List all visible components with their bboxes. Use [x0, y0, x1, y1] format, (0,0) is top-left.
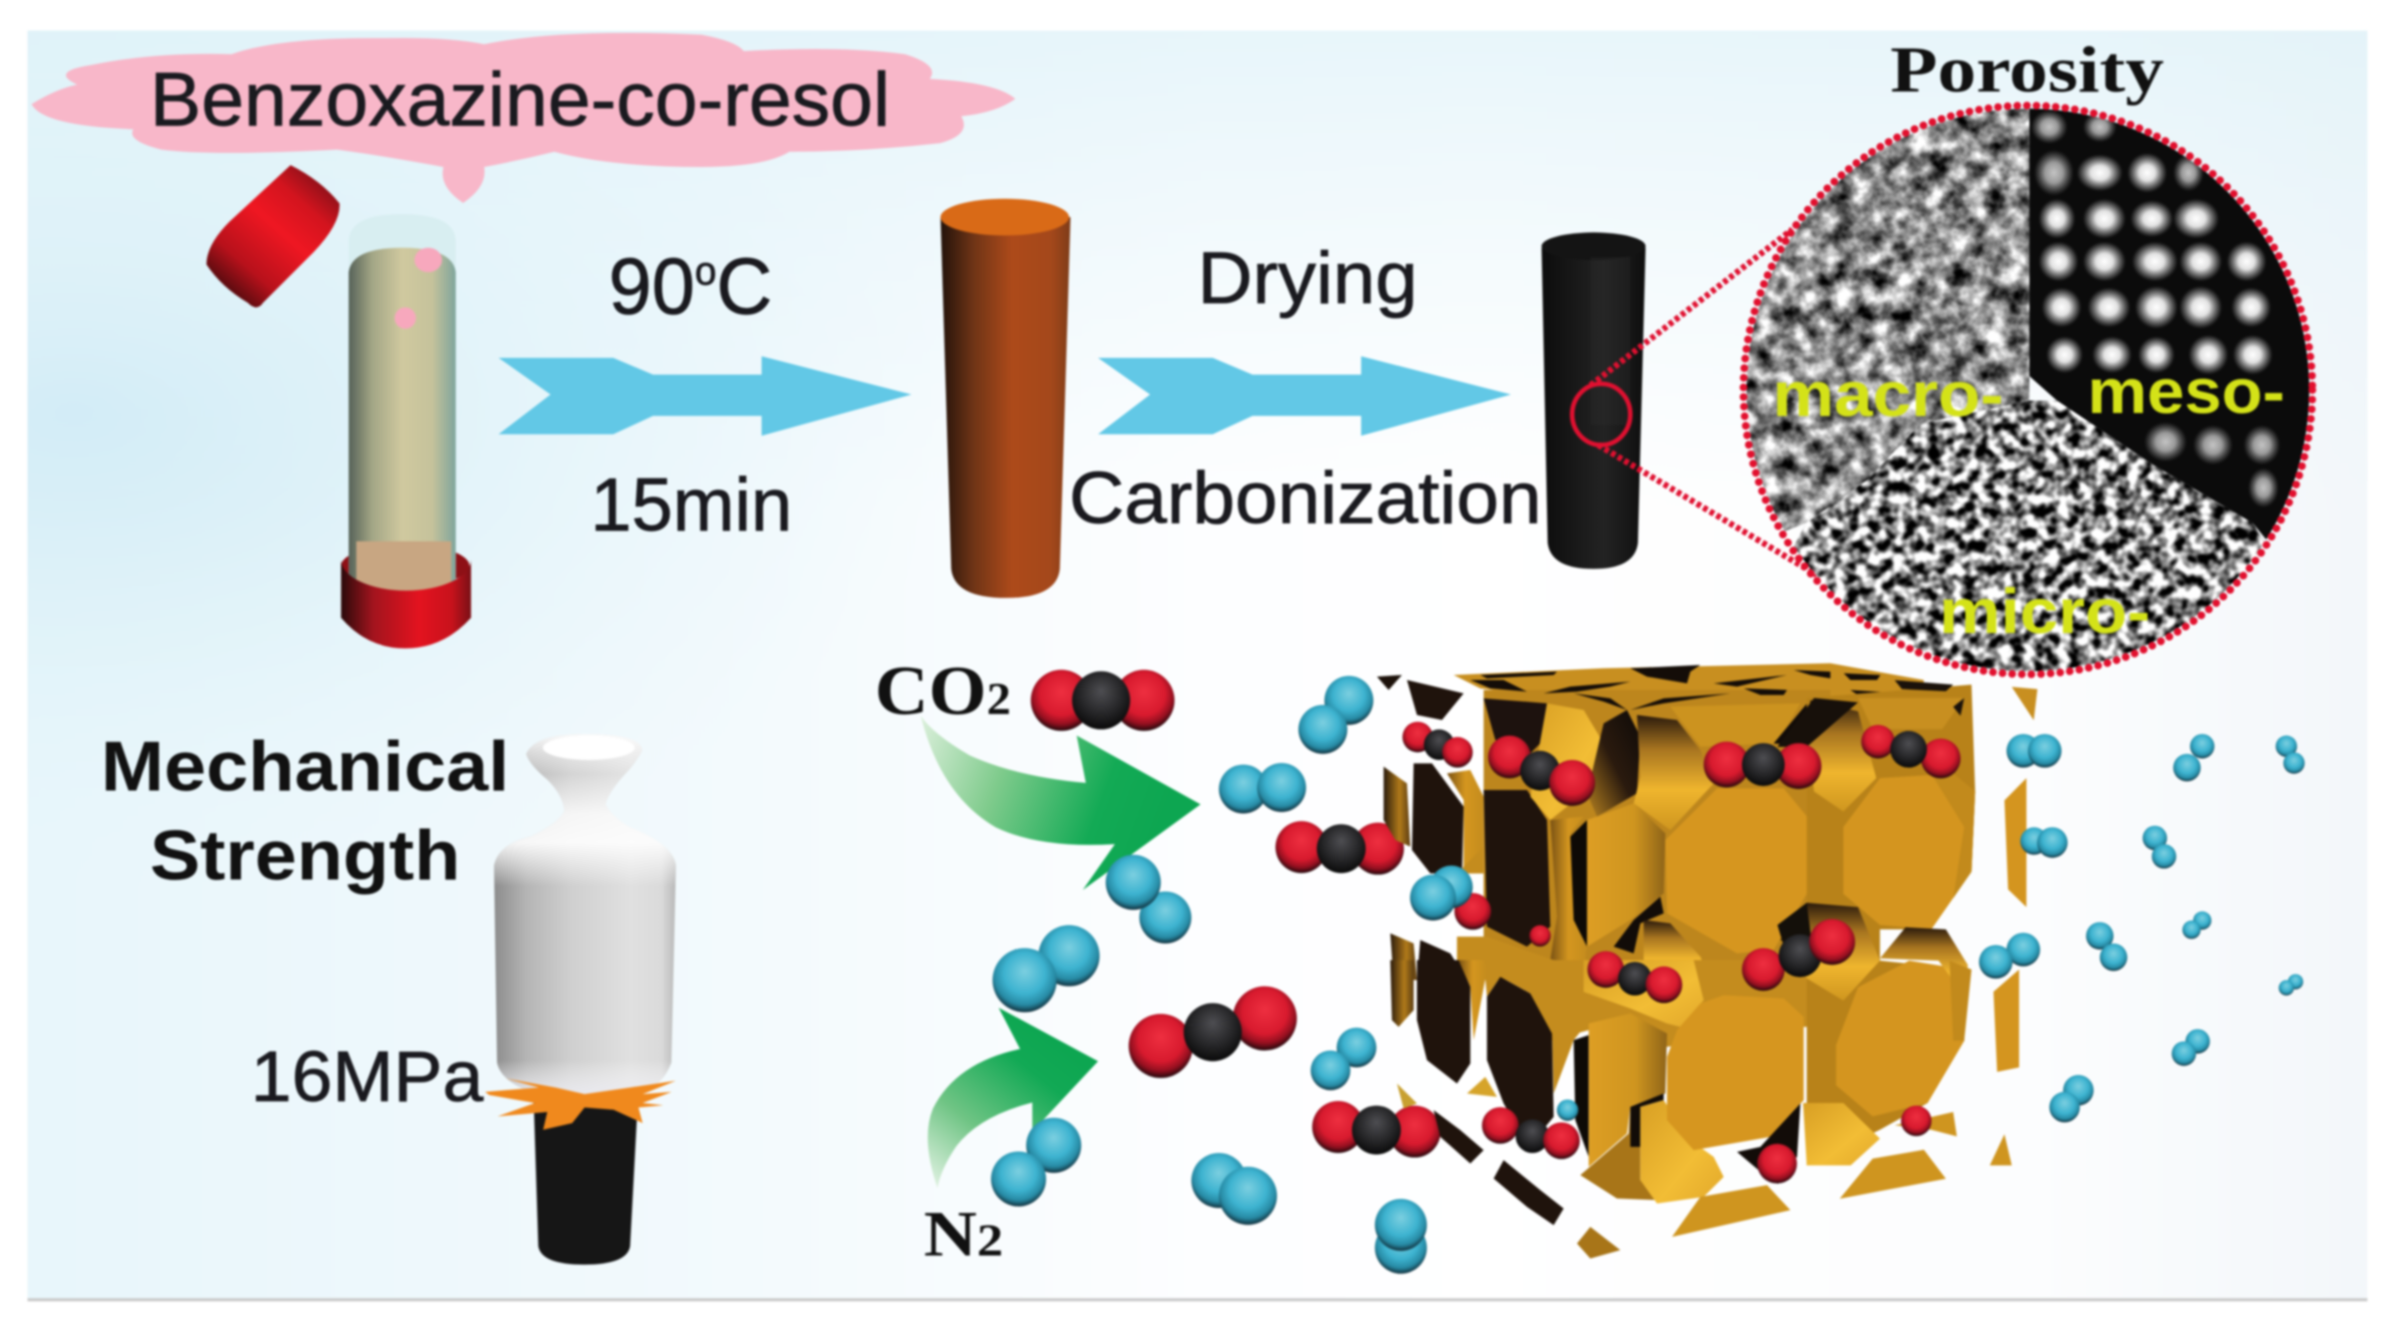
icon: orange impact burst — [485, 1079, 676, 1130]
icon: white compression weight — [494, 734, 676, 1096]
molecules: CO2 adsorbed in cube pores — [1402, 722, 1961, 1184]
arrow: drying and carbonization step — [1098, 356, 1511, 436]
heading: Drying: Drying — [1197, 237, 1418, 319]
heading: Mechanical Strength: Mechanical — [101, 727, 509, 806]
arrow: CO2 green flow — [921, 716, 1201, 890]
molecule legend: CO2 — [1031, 670, 1175, 731]
label: 16MPa: 16MPa — [251, 1037, 483, 1117]
heading: 90°C: 90 — [609, 241, 697, 330]
porous gold carbon cube — [1377, 663, 2037, 1258]
heading: 15min: 15min — [590, 463, 792, 547]
icon: red tube lid — [206, 165, 340, 307]
label: micro-: micro- — [1939, 577, 2150, 647]
heading: Mechanical Strength: Strength — [150, 815, 460, 894]
label: macro-: macro- — [1773, 360, 2003, 430]
heading: Mechanical Strength — [101, 727, 509, 894]
micrograph: microporous region — [1793, 398, 2264, 673]
molecules: N2 passing through — [1979, 734, 2305, 1122]
cube: upper left block — [1377, 663, 1924, 980]
cube: right block — [1777, 680, 2037, 1199]
micrograph: macroporous region — [1744, 107, 2031, 532]
label: CO2: CO2 — [875, 652, 1011, 730]
panel: porosity micrograph lens — [1728, 92, 2325, 703]
icon: black carbon rod — [1542, 232, 1646, 569]
label: meso-: meso- — [2088, 357, 2285, 427]
molecules: incoming N2 and CO2 — [991, 676, 1441, 1274]
micrograph: mesoporous region — [2028, 106, 2311, 540]
cloud label: Benzoxazine-co-resol — [32, 33, 1015, 203]
arrow: heating step — [499, 356, 911, 436]
icon: brown gel rod — [941, 199, 1071, 598]
heading: 90°C: o — [695, 249, 716, 293]
magnifier lines and red ring — [1572, 229, 1817, 575]
heading: 90°C: C — [716, 241, 772, 330]
label: N2: N2 — [924, 1198, 1003, 1269]
icon: black sample under load — [534, 1103, 638, 1265]
cloud label: Benzoxazine-co-resol: Benzoxazine-co-resol — [150, 57, 890, 142]
arrow: N2 green flow — [928, 1008, 1098, 1188]
heading: Carbonization: Carbonization — [1069, 457, 1542, 539]
icon: test tube with solution and red cap — [341, 214, 471, 648]
heading: Porosity: Porosity — [1890, 34, 2164, 107]
cube: lower left block — [1390, 960, 1830, 1258]
